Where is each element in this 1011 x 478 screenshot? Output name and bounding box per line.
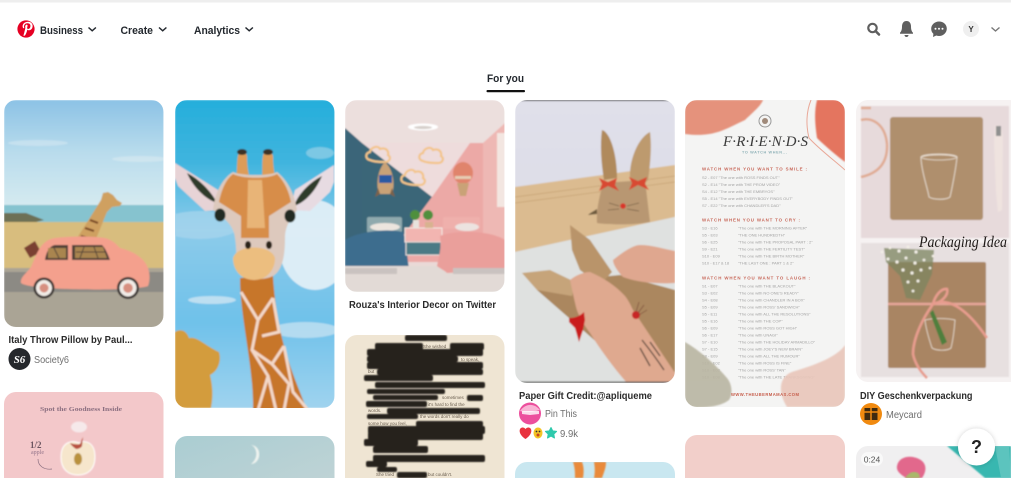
section: laugh: S4 - E08 bbox=[702, 298, 718, 302]
pin caption: Rouza's Interior Decor: Rouza's Interior Decor on Twitter bbox=[349, 299, 496, 311]
paper under hands bbox=[537, 275, 675, 373]
pin: giraffe portrait photo bbox=[175, 100, 334, 408]
section: smile: WATCH WHEN YOU WANT TO SMILE : bbox=[702, 166, 808, 172]
pin caption: DIY Geschenkverpackung: DIY Geschenkverpackung bbox=[860, 390, 972, 402]
user avatar bbox=[963, 21, 979, 37]
pin: blackout poetry: but couldn't. bbox=[428, 472, 452, 477]
FRIENDS wordmark: F·R·I·E·N·D·S bbox=[722, 134, 808, 150]
pin: kids bedroom photo bbox=[345, 100, 505, 292]
hands bbox=[613, 245, 675, 283]
help button: ? bbox=[971, 437, 982, 457]
pin: plain pink bbox=[685, 435, 845, 478]
icon: search bbox=[868, 24, 879, 34]
section: cry bbox=[702, 218, 813, 266]
section: cry: WATCH WHEN YOU WANT TO CRY : bbox=[702, 218, 801, 222]
pin: blackout poetry: to speak, bbox=[461, 357, 479, 362]
pin: blackout poetry: it's hard to find the bbox=[428, 402, 465, 407]
pin: blackout poetry: She tried bbox=[376, 472, 395, 477]
section: laugh: S10 - E03 bbox=[702, 368, 721, 372]
video duration badge bbox=[861, 452, 883, 466]
pin: blackout poetry: She wished bbox=[423, 344, 447, 349]
tree bbox=[175, 330, 220, 408]
icon: pinterest logo bbox=[17, 20, 35, 38]
avatar: Meycard bbox=[860, 403, 882, 425]
reactions row bbox=[520, 427, 557, 439]
pin: blackout poetry bbox=[345, 335, 505, 478]
pin: apple goodness poster: Spot the Goodness Inside bbox=[40, 406, 122, 413]
section: cry: "The one with THE FERTILITY TEST" bbox=[738, 246, 806, 252]
section: laugh: "The one with ROSS' SANDWICH" bbox=[738, 304, 800, 310]
section: laugh: S5 - E16 bbox=[702, 318, 718, 324]
pin: blackout poetry: words. bbox=[368, 408, 381, 413]
section: laugh: S7 - E15 bbox=[702, 346, 718, 352]
balloon shelf bbox=[453, 162, 473, 184]
section: laugh: "The one with THE COP" bbox=[738, 318, 783, 324]
suitcase on roof bbox=[24, 241, 41, 258]
tab: For you: For you bbox=[487, 73, 524, 85]
section: laugh: "The one with ALL THE RESOLUTIONS" bbox=[738, 312, 811, 316]
icon: notifications bell bbox=[900, 21, 913, 37]
tab: For you bbox=[486, 73, 525, 92]
pin caption: DIY Geschenkverpackung bbox=[860, 390, 972, 425]
section: laugh: "The one with CHANDLER IN A BOX" bbox=[738, 298, 805, 302]
section: cry: "The one with THE MORNING AFTER" bbox=[738, 226, 808, 230]
neck bbox=[240, 276, 307, 410]
section: laugh: S10 - E02 bbox=[702, 360, 721, 366]
section: laugh: "The one with NO ONE'S READY" bbox=[738, 290, 800, 296]
section: laugh: "The one with THE BLACKOUT" bbox=[738, 284, 796, 288]
pin caption: Paper Gift bbox=[519, 390, 652, 440]
pin: video flower photo bbox=[856, 446, 1011, 478]
poster top shapes bbox=[685, 100, 763, 135]
section: laugh bbox=[702, 276, 816, 380]
section: laugh: S1 - E07 bbox=[702, 284, 718, 288]
icon: account chevron bbox=[992, 28, 1000, 31]
section: cry: S10 - E17 & 18 bbox=[702, 260, 730, 266]
baby's breath flowers bbox=[884, 248, 934, 300]
menu: Business: Business bbox=[40, 25, 83, 37]
section: laugh: "The one with ROSS GOT HIGH" bbox=[738, 326, 798, 330]
pin caption: DIY Geschenkverpackung: Meycard bbox=[886, 410, 922, 421]
horns bbox=[236, 152, 250, 176]
pin: apple goodness poster bbox=[4, 392, 164, 478]
section: laugh: "The one with ALL THE RUMOUR" bbox=[738, 354, 800, 358]
help button bbox=[958, 428, 995, 466]
section: smile: S4 - E12 "The one with THE EMBRYOS" bbox=[702, 189, 775, 194]
section: laugh: "The one with ROSS IS FINE" bbox=[738, 360, 792, 366]
section: laugh: WATCH WHEN YOU WANT TO LAUGH : bbox=[702, 276, 811, 280]
bunny bows bbox=[599, 178, 619, 191]
pin caption: Paper Gift: Paper Gift Credit:@apliqueme bbox=[519, 390, 652, 402]
section: laugh: "The one with THE HOLIDAY ARMADILLO" bbox=[738, 340, 816, 344]
pin: Friends episode guide poster: WWW.THEUBERMAMAS.COM bbox=[731, 392, 800, 397]
section: cry: S6 - E25 bbox=[702, 240, 718, 244]
section: smile: S2 - E14 "The one with THE PROM VIDEO" bbox=[702, 182, 781, 187]
section: cry: S9 - E21 bbox=[702, 246, 718, 252]
navigation bar bbox=[17, 20, 999, 38]
neon clouds bbox=[366, 147, 443, 185]
head bbox=[213, 172, 297, 279]
pin: orange figure on light blue bbox=[515, 462, 675, 478]
avatar: Society6: S6 bbox=[14, 354, 26, 366]
section: smile: S2 - E07 "The one with ROSS FINDS OUT" bbox=[702, 175, 780, 180]
pin: blackout poetry: some how you feel, bbox=[368, 421, 407, 426]
poster bottom shapes bbox=[685, 342, 731, 407]
icon: messages bbox=[931, 21, 947, 37]
red bows on paper bbox=[569, 312, 585, 342]
section: laugh: S10 - E08 bbox=[702, 374, 721, 380]
section: laugh: S8 - E09 bbox=[702, 354, 718, 358]
pin: sky with moon bbox=[175, 436, 335, 478]
giraffe in car bbox=[78, 191, 122, 238]
pin caption: Italy Throw Pillow: Italy Throw Pillow by Paul... bbox=[8, 334, 133, 346]
pin: blackout poetry: but bbox=[368, 369, 375, 374]
pin: blackout poetry: the words don't really do bbox=[420, 414, 469, 419]
menu: Analytics: Analytics bbox=[194, 25, 240, 37]
bunny bag bbox=[601, 130, 617, 180]
section: smile: S7 - E22 "The one with CHANDLER'S DAD" bbox=[702, 203, 781, 208]
section: laugh: S6 - E09 bbox=[702, 326, 718, 330]
pin: apple goodness poster: apple bbox=[31, 450, 44, 456]
section: cry: "THE LAST ONE : PART 1 & 2" bbox=[738, 260, 794, 266]
beds and nightstand bbox=[367, 217, 402, 233]
pin: Friends episode guide poster: TO WATCH WHEN... bbox=[742, 150, 787, 154]
section: cry: "The one with THE PROPOSAL PART : 2" bbox=[738, 240, 813, 244]
section: laugh: S6 - E17 bbox=[702, 332, 718, 338]
pin: Italy giraffe car photo bbox=[4, 100, 168, 328]
menu: Create: Create bbox=[120, 25, 153, 37]
pin caption: Paper Gift: Pin This bbox=[545, 409, 577, 420]
back wall bbox=[362, 143, 483, 262]
section: laugh: S7 - E10 bbox=[702, 340, 718, 344]
pin: paper bunny gift photo bbox=[515, 100, 675, 383]
pin: kraft paper packaging photo bbox=[856, 100, 1011, 382]
pin caption: Italy Throw Pillow bbox=[8, 334, 133, 370]
rocket shelf bbox=[377, 162, 394, 194]
section: laugh: S5 - E11 bbox=[702, 312, 718, 316]
user avatar: Y bbox=[968, 25, 974, 34]
avatar: Pin This bbox=[519, 402, 541, 424]
section: cry: "The one with THE BIRTH MOTHER" bbox=[738, 254, 805, 258]
top browser strip bbox=[0, 0, 1011, 2]
section: laugh: S5 - E09 bbox=[702, 304, 718, 310]
pin: Friends episode guide poster bbox=[685, 100, 845, 407]
pin: apple goodness poster: 1/2 bbox=[30, 440, 42, 450]
section: laugh: "The one with JOEY'S NEW BRAIN" bbox=[738, 346, 803, 352]
section: cry: S5 - E03 bbox=[702, 232, 718, 238]
ears bbox=[175, 163, 222, 211]
section: laugh: S3 - E02 bbox=[702, 290, 718, 296]
section: laugh: "The one with ROSS' TAN" bbox=[738, 368, 786, 372]
section: cry: S3 - E16 bbox=[702, 226, 718, 230]
car body bbox=[21, 236, 149, 289]
section: laugh: "The one with THE LATE THANKSGIVING" bbox=[738, 374, 815, 380]
section: smile: S5 - E14 "The one with EVERYBODY FINDS OUT" bbox=[702, 196, 794, 201]
pin caption: Italy Throw Pillow: Society6 bbox=[34, 355, 69, 366]
ribbon bbox=[888, 303, 986, 305]
pin caption: Paper Gift: 9.9k bbox=[560, 429, 579, 440]
section: smile bbox=[702, 166, 808, 208]
pin: blackout poetry: sometimes bbox=[442, 395, 465, 400]
section: cry: S10 - E09 bbox=[702, 254, 721, 258]
section: cry: "THE ONE HUNDREDTH" bbox=[738, 232, 786, 238]
section: laugh: "The one with UNAGI" bbox=[738, 332, 778, 338]
video duration badge: 0:24 bbox=[864, 454, 881, 464]
